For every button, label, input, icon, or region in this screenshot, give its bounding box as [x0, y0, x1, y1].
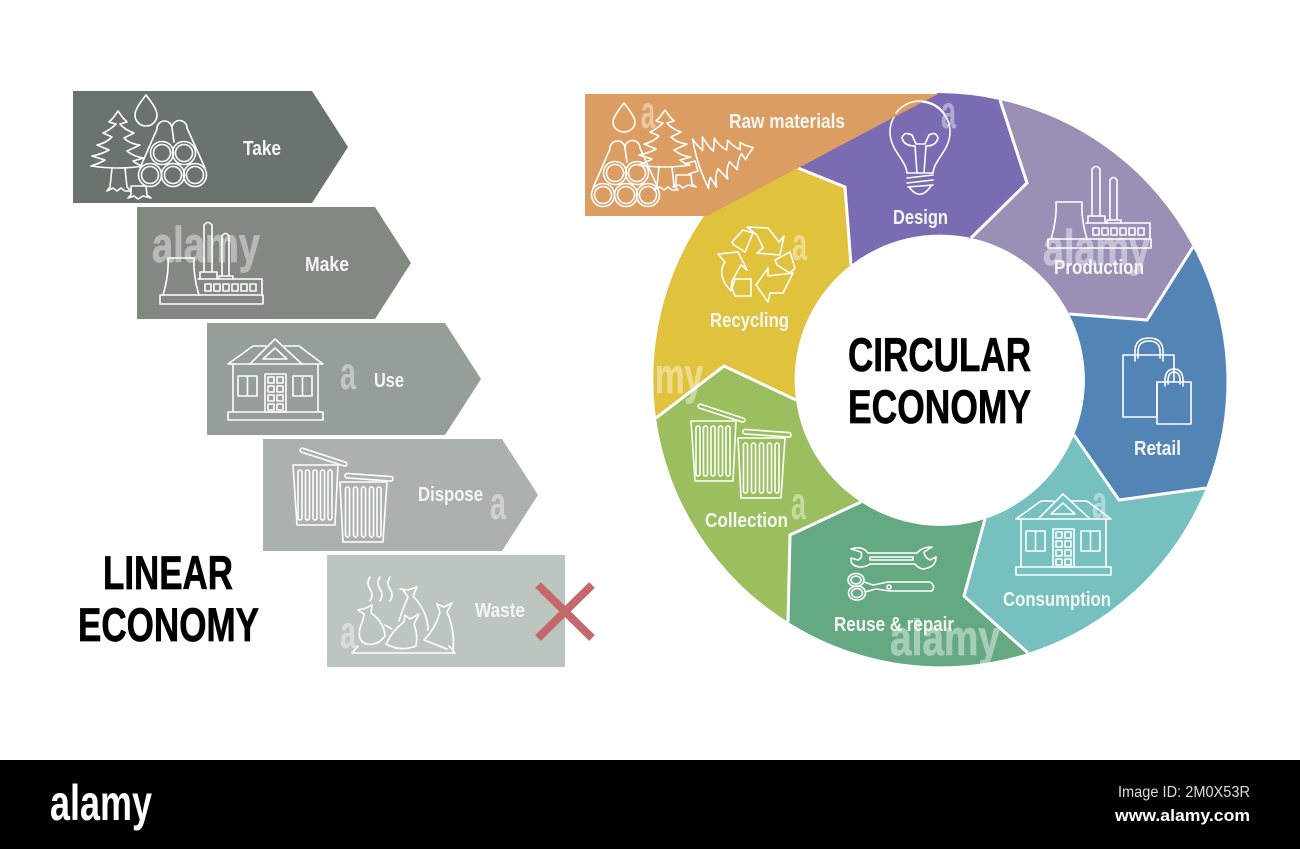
label: take: Take: [243, 138, 281, 160]
box: waste: [327, 555, 592, 667]
arrow: make: [137, 207, 411, 319]
icon: red cross: [538, 585, 592, 638]
icon: bins: [691, 404, 791, 498]
segment: collection: [656, 366, 861, 622]
icon: trash bags: [352, 577, 455, 653]
label: recycling: Recycling: [710, 310, 789, 332]
segment: reuse and repair: [788, 502, 1028, 666]
heading: circular economy: CIRCULAR: [848, 328, 1031, 381]
heading: linear economy: [78, 546, 259, 651]
image id: Image ID: 2M0X53R: [1118, 784, 1250, 801]
watermark: a: [340, 606, 356, 658]
heading: linear economy: LINEAR: [103, 546, 233, 599]
icon: house: [228, 339, 323, 420]
segment: consumption: [964, 435, 1206, 653]
panel: linear economy: [73, 91, 592, 667]
label: waste: Waste: [475, 600, 525, 622]
light bulb top over banner: [896, 101, 944, 113]
label: dispose: Dispose: [418, 484, 483, 506]
heading: circular economy: [848, 328, 1031, 433]
icon: recycle arrows: [718, 227, 795, 302]
label: reuse and repair: Reuse & repair: [834, 614, 954, 636]
segment: recycling: [653, 168, 851, 418]
watermark: a: [340, 347, 356, 399]
watermark: alamy: [1043, 220, 1150, 276]
label: consumption: Consumption: [1003, 589, 1111, 611]
panel: circular economy: [585, 86, 1226, 666]
footer bar: [0, 760, 1300, 849]
segment: design: [798, 86, 1027, 265]
icon: bins: [293, 448, 393, 542]
watermark: alamy: [152, 217, 260, 273]
label: collection: Collection: [705, 510, 788, 532]
label: raw materials: Raw materials: [729, 111, 845, 133]
icon: wrench and scissors: [848, 547, 936, 600]
watermark: my: [655, 348, 703, 404]
watermark: a: [641, 86, 655, 138]
icon: factory: [1048, 166, 1151, 248]
icon: light bulb: [890, 102, 950, 194]
footer logo: alamy: [50, 775, 152, 831]
icon: house: [1016, 494, 1111, 575]
icon: tree, logs and water drop: [91, 95, 206, 199]
arrow: use: [207, 323, 481, 435]
watermark: a: [791, 477, 806, 529]
label: use: Use: [374, 370, 404, 392]
label: production: Production: [1054, 257, 1144, 279]
icon: drop, logs and trees: [592, 103, 761, 206]
segment separators: [656, 100, 1206, 653]
banner: raw materials: [585, 86, 938, 216]
heading: linear economy: ECONOMY: [78, 598, 259, 651]
segment: production: [971, 100, 1193, 320]
watermark: a: [490, 477, 506, 529]
watermark: a: [1092, 476, 1107, 528]
heading: circular economy: ECONOMY: [848, 380, 1031, 433]
arrow: dispose: [263, 439, 538, 551]
label: design: Design: [893, 207, 948, 229]
label: retail: Retail: [1134, 438, 1181, 460]
label: make: Make: [305, 254, 349, 276]
segment: retail: [1069, 247, 1226, 500]
icon: factory: [160, 222, 263, 304]
watermark: a: [792, 218, 807, 270]
watermark: a: [941, 86, 956, 138]
icon: shopping bags: [1123, 338, 1191, 424]
website: www.alamy.com: [1114, 806, 1250, 825]
arrow: take: [73, 91, 348, 203]
watermark: alamy: [890, 610, 1000, 666]
